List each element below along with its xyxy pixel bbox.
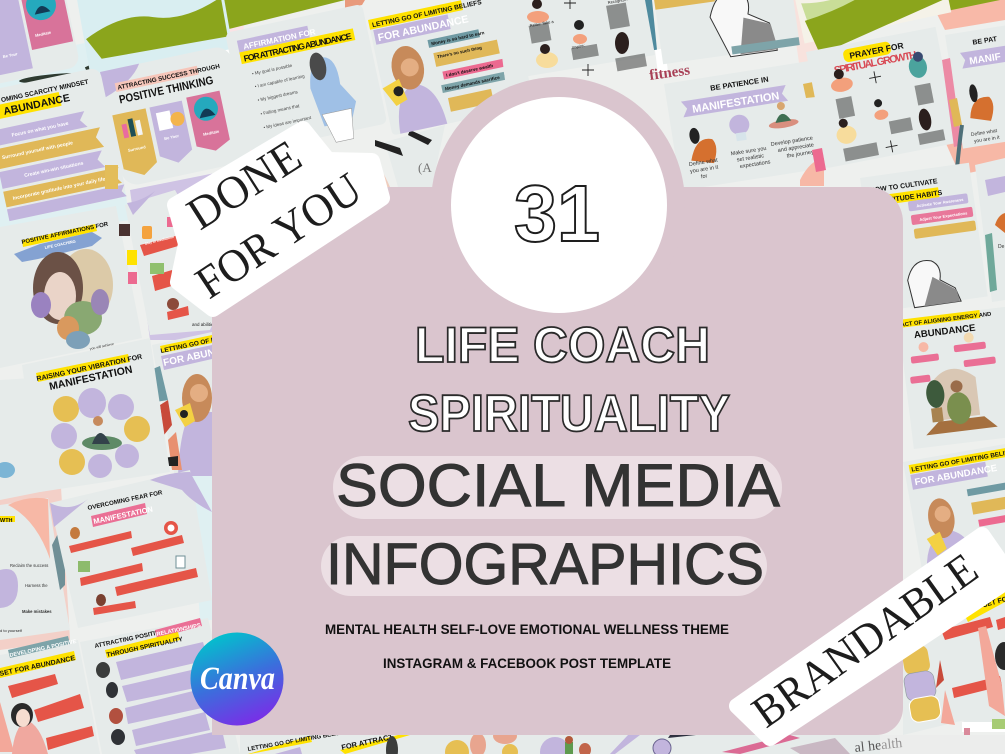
- heading: spirituality: SPIRITUALITY: [408, 385, 730, 443]
- background card: prayer figures top center: Relax: Take a: [529, 19, 555, 28]
- background card: be patience in manifestation: Make sure you: [730, 146, 767, 157]
- background card: right fragment below be patience: De: [998, 244, 1005, 250]
- background card: overcoming scarcity mindset: Focus on what you have: [11, 121, 69, 139]
- background card: developing a positive mindset for abundance: DEVELOPING A POSITIVE: [9, 639, 77, 659]
- background card: be patience in manifestation: Define what: [689, 158, 719, 168]
- background strip: bottom cards: LETTING GO OF LIMITING BELIEFS: [247, 729, 348, 753]
- background card: pale logo card behind circle: [375, 125, 445, 187]
- background card: be patience in manifestation: expectations: [739, 159, 771, 170]
- background card: overcoming scarcity mindset: ABUNDANCE: [2, 92, 71, 118]
- background card: impact of aligning energy and abundance: [898, 305, 1005, 449]
- background card: letting go of limiting beliefs: There's no such thing: [437, 45, 482, 59]
- background strip: bottom cards: FOR ATTRACT: [341, 732, 394, 752]
- background card: attracting positive relationships through spirituality: ATTRACTING POSITIVE: [94, 629, 164, 650]
- background card: green landscape: [73, 0, 233, 74]
- background card: be patience right fragment: MANIF: [969, 52, 1002, 67]
- main panel: mauve background with circle tab: [212, 77, 903, 735]
- background card: attracting success through positive thinking: Meditate: [203, 128, 220, 137]
- background card: prayer for spiritual growth: [806, 27, 958, 168]
- background card: prayer for spiritual growth: SPIRITUAL GROWTH: [833, 49, 918, 77]
- background card: left fragment with brain and list: Reclaim the success: [10, 563, 48, 568]
- chart: circle of blobs around meditating figure: [51, 388, 150, 478]
- background card: how to cultivate gratitude habits: Adjust Your Expectations: [919, 210, 968, 222]
- background card: yellow and lavender note blobs: [901, 610, 965, 735]
- illustration: woman portrait: [31, 249, 113, 349]
- background card: attracting success through positive thinking: [100, 45, 254, 187]
- pill heading: infographics: INFOGRAPHICS: [326, 532, 764, 597]
- background card: be patience right fragment: [945, 22, 1005, 149]
- background card: positive affirmations with watercolor portrait: LIFE COACHING: [44, 239, 76, 250]
- background card: how to cultivate gratitude habits: HOW TO CULTIVATE: [869, 178, 938, 195]
- background card: overcoming scarcity mindset: OMING SCARCITY MINDSET: [0, 79, 89, 104]
- background card: letting go of limiting beliefs: [368, 0, 534, 135]
- background card: positive affirmations with watercolor portrait: POSITIVE AFFIRMATIONS FOR: [21, 222, 109, 246]
- background card: be patience in manifestation: the journey: [786, 149, 814, 160]
- background card: attracting success through positive thinking: Be Your: [164, 133, 180, 141]
- background card: overcoming fear for manifestation: MANIFESTATION: [93, 505, 154, 526]
- heading: life coach: LIFE COACH: [415, 317, 710, 373]
- background card: developing a positive mindset for abundance: SET FOR ABUNDANCE: [0, 655, 76, 678]
- background card: positive affirmations with watercolor portrait: [0, 206, 142, 368]
- background card: red list partially behind banner: Stay in meditation: [144, 235, 175, 246]
- background card: affirmation for attracting abundance: • Failing means that: [260, 103, 301, 116]
- background card: affirmation for attracting abundance: • My goal is possible: [252, 63, 293, 76]
- background card: pale logo card behind circle: (A: [418, 160, 432, 175]
- background card: positive affirmations with watercolor portrait: you will achieve: [89, 342, 114, 351]
- background card: left fragment with brain and list: d to yourself: [0, 628, 23, 633]
- background card: developing a positive mindset for abundance: [0, 636, 100, 754]
- background card: affirmation for attracting abundance: AFFIRMATION FOR: [242, 27, 316, 51]
- background card: be patience in manifestation: [664, 61, 829, 191]
- background card: overcoming scarcity mindset: [0, 67, 127, 221]
- background card: meditate columns fragment: Be Your: [2, 51, 18, 59]
- background card: raising your vibration for manifestation: [22, 338, 170, 492]
- background card: left fragment with brain and list: WTH: [0, 518, 13, 524]
- number: 31: 31: [514, 169, 600, 258]
- background card: be patience in manifestation: you are in it: [690, 165, 719, 175]
- background card: affirmation for attracting abundance: FOR ATTRACTING ABUNDANCE: [243, 31, 353, 64]
- pill heading: social media: SOCIAL MEDIA: [336, 452, 780, 519]
- icon: lightbulb: [728, 113, 752, 142]
- background card: be patience right fragment: BE PAT: [972, 36, 998, 47]
- background card: left fragment with brain and list: [0, 378, 70, 640]
- background card: how to cultivate gratitude habits: [860, 163, 988, 313]
- background card: overcoming fear for manifestation: [50, 470, 212, 628]
- background card: attracting success through positive thinking: POSITIVE THINKING: [118, 75, 215, 106]
- banner: done for you: DONE: [178, 130, 310, 239]
- background card: attracting success through positive thinking: ATTRACTING SUCCESS THROUGH: [117, 63, 221, 92]
- background card: attracting positive relationships through spirituality: RELATIONSHIPS: [156, 623, 202, 638]
- background card: affirmation for attracting abundance: • My biggest dreams: [257, 89, 299, 103]
- badge: Canva logo: Canva: [200, 661, 275, 697]
- background card: how to cultivate gratitude habits: GRATITUDE HABITS: [874, 190, 943, 206]
- background card: be patience in manifestation: MANIFESTATION: [691, 90, 780, 116]
- icon: meditating woman: [765, 100, 799, 130]
- background card: letting go of limiting beliefs, left copy: LETTING GO OF LIM: [160, 335, 223, 355]
- background card: overcoming scarcity mindset: Create win-win situations: [24, 161, 84, 179]
- background card: letting go of limiting beliefs: Money demands sacrifice: [445, 75, 501, 91]
- background card: person praying in hood: [652, 0, 800, 66]
- background card: green landscape top right: [790, 0, 954, 57]
- background card: red list partially behind banner: and abilities: [192, 322, 217, 327]
- background card: be patience in manifestation: Develop patience: [770, 135, 813, 148]
- background card: letting go of limiting beliefs, right copy: FOR ABUNDANCE: [914, 463, 998, 488]
- background card: overcoming fear for manifestation: OVERCOMING FEAR FOR: [87, 489, 164, 512]
- background card: red list partially behind banner: [105, 165, 230, 335]
- background card: be patience right fragment: you are in it: [974, 135, 1001, 145]
- background card: impact of aligning energy and abundance: ABUNDANCE: [913, 323, 977, 341]
- background card: raising your vibration for manifestation: MANIFESTATION: [48, 364, 134, 393]
- background card: prayer figures top center: [495, 0, 655, 80]
- background card: raising your vibration for manifestation: RAISING YOUR VIBRATION FOR: [36, 354, 143, 383]
- background card: affirmation for attracting abundance: • I am capable of learning: [254, 73, 306, 89]
- background card: be patience in manifestation: BE PATIENCE IN: [710, 75, 769, 93]
- background card: overcoming scarcity mindset: Incorporate gratitude into your daily life: [12, 176, 106, 202]
- background card: be patience in manifestation: for: [701, 173, 708, 180]
- background card: letting go of limiting beliefs, right copy: [903, 442, 1005, 570]
- banner: brandable: BRANDABLE: [743, 543, 987, 737]
- white circle with number 31: [451, 97, 667, 313]
- background card: prayer for spiritual growth: PRAYER FOR: [849, 40, 904, 61]
- background card: prayer figures top center: Inspire:: [571, 43, 585, 50]
- background card: affirmation for attracting abundance: • My ideas are important: [263, 115, 312, 130]
- background card: attracting success through positive thinking: Surround: [127, 144, 147, 153]
- background card: meditate columns fragment: Meditate: [35, 30, 52, 38]
- subtitle: theme line: MENTAL HEALTH SELF-LOVE EMOTIONAL WELLNESS THEME: [325, 621, 729, 637]
- icon: woman sitting: [686, 125, 719, 167]
- background card: letting go of limiting beliefs, left copy: FOR ABUND: [162, 346, 223, 369]
- background card: letting go of limiting beliefs: Money is so hard to earn: [431, 30, 485, 46]
- background card: be patience right fragment: Define what: [971, 128, 998, 138]
- background card: attracting positive relationships through spirituality: [80, 618, 240, 754]
- background card: meditate columns fragment: [0, 0, 81, 87]
- background text: fitness fragment: fitness: [648, 62, 691, 84]
- dark leaf accents: [19, 0, 222, 85]
- background card: impact of aligning energy and abundance: ACT OF ALIGNING ENERGY AND: [900, 312, 992, 329]
- background card: affirmation for attracting abundance: [225, 4, 389, 160]
- background card: how to cultivate gratitude habits: Activate Your Awareness: [916, 197, 965, 208]
- background card: letting go of limiting beliefs, left copy: [148, 332, 223, 478]
- banner: done for you: FOR YOU: [186, 163, 370, 308]
- background card: right fragment below be patience: [975, 158, 1005, 302]
- background card: be patience in manifestation: and appreciate: [777, 142, 814, 154]
- background card: letting go of limiting beliefs: I don't deserve wealth: [446, 63, 494, 78]
- background card: be patience in manifestation: set realistic: [736, 153, 765, 164]
- background card: letting go of limiting beliefs: FOR ABUNDANCE: [377, 13, 470, 44]
- background card: left fragment with brain and list: Make mistakes: [22, 609, 52, 614]
- background card: left fragment with brain and list: Harness the: [25, 583, 48, 588]
- background strip: bottom cards: [240, 728, 1005, 754]
- badge: Canva logo: [190, 632, 284, 726]
- background card: overcoming scarcity mindset: Surround yourself with people: [2, 140, 74, 161]
- subtitle: template line: INSTAGRAM & FACEBOOK POST TEMPLATE: [383, 655, 671, 671]
- illustration: woman meditating with plant: [919, 364, 998, 435]
- background card: attracting positive relationships through spirituality: THROUGH SPIRITUALITY: [106, 636, 184, 659]
- background card: mindset for abundance right copy: [941, 590, 1005, 736]
